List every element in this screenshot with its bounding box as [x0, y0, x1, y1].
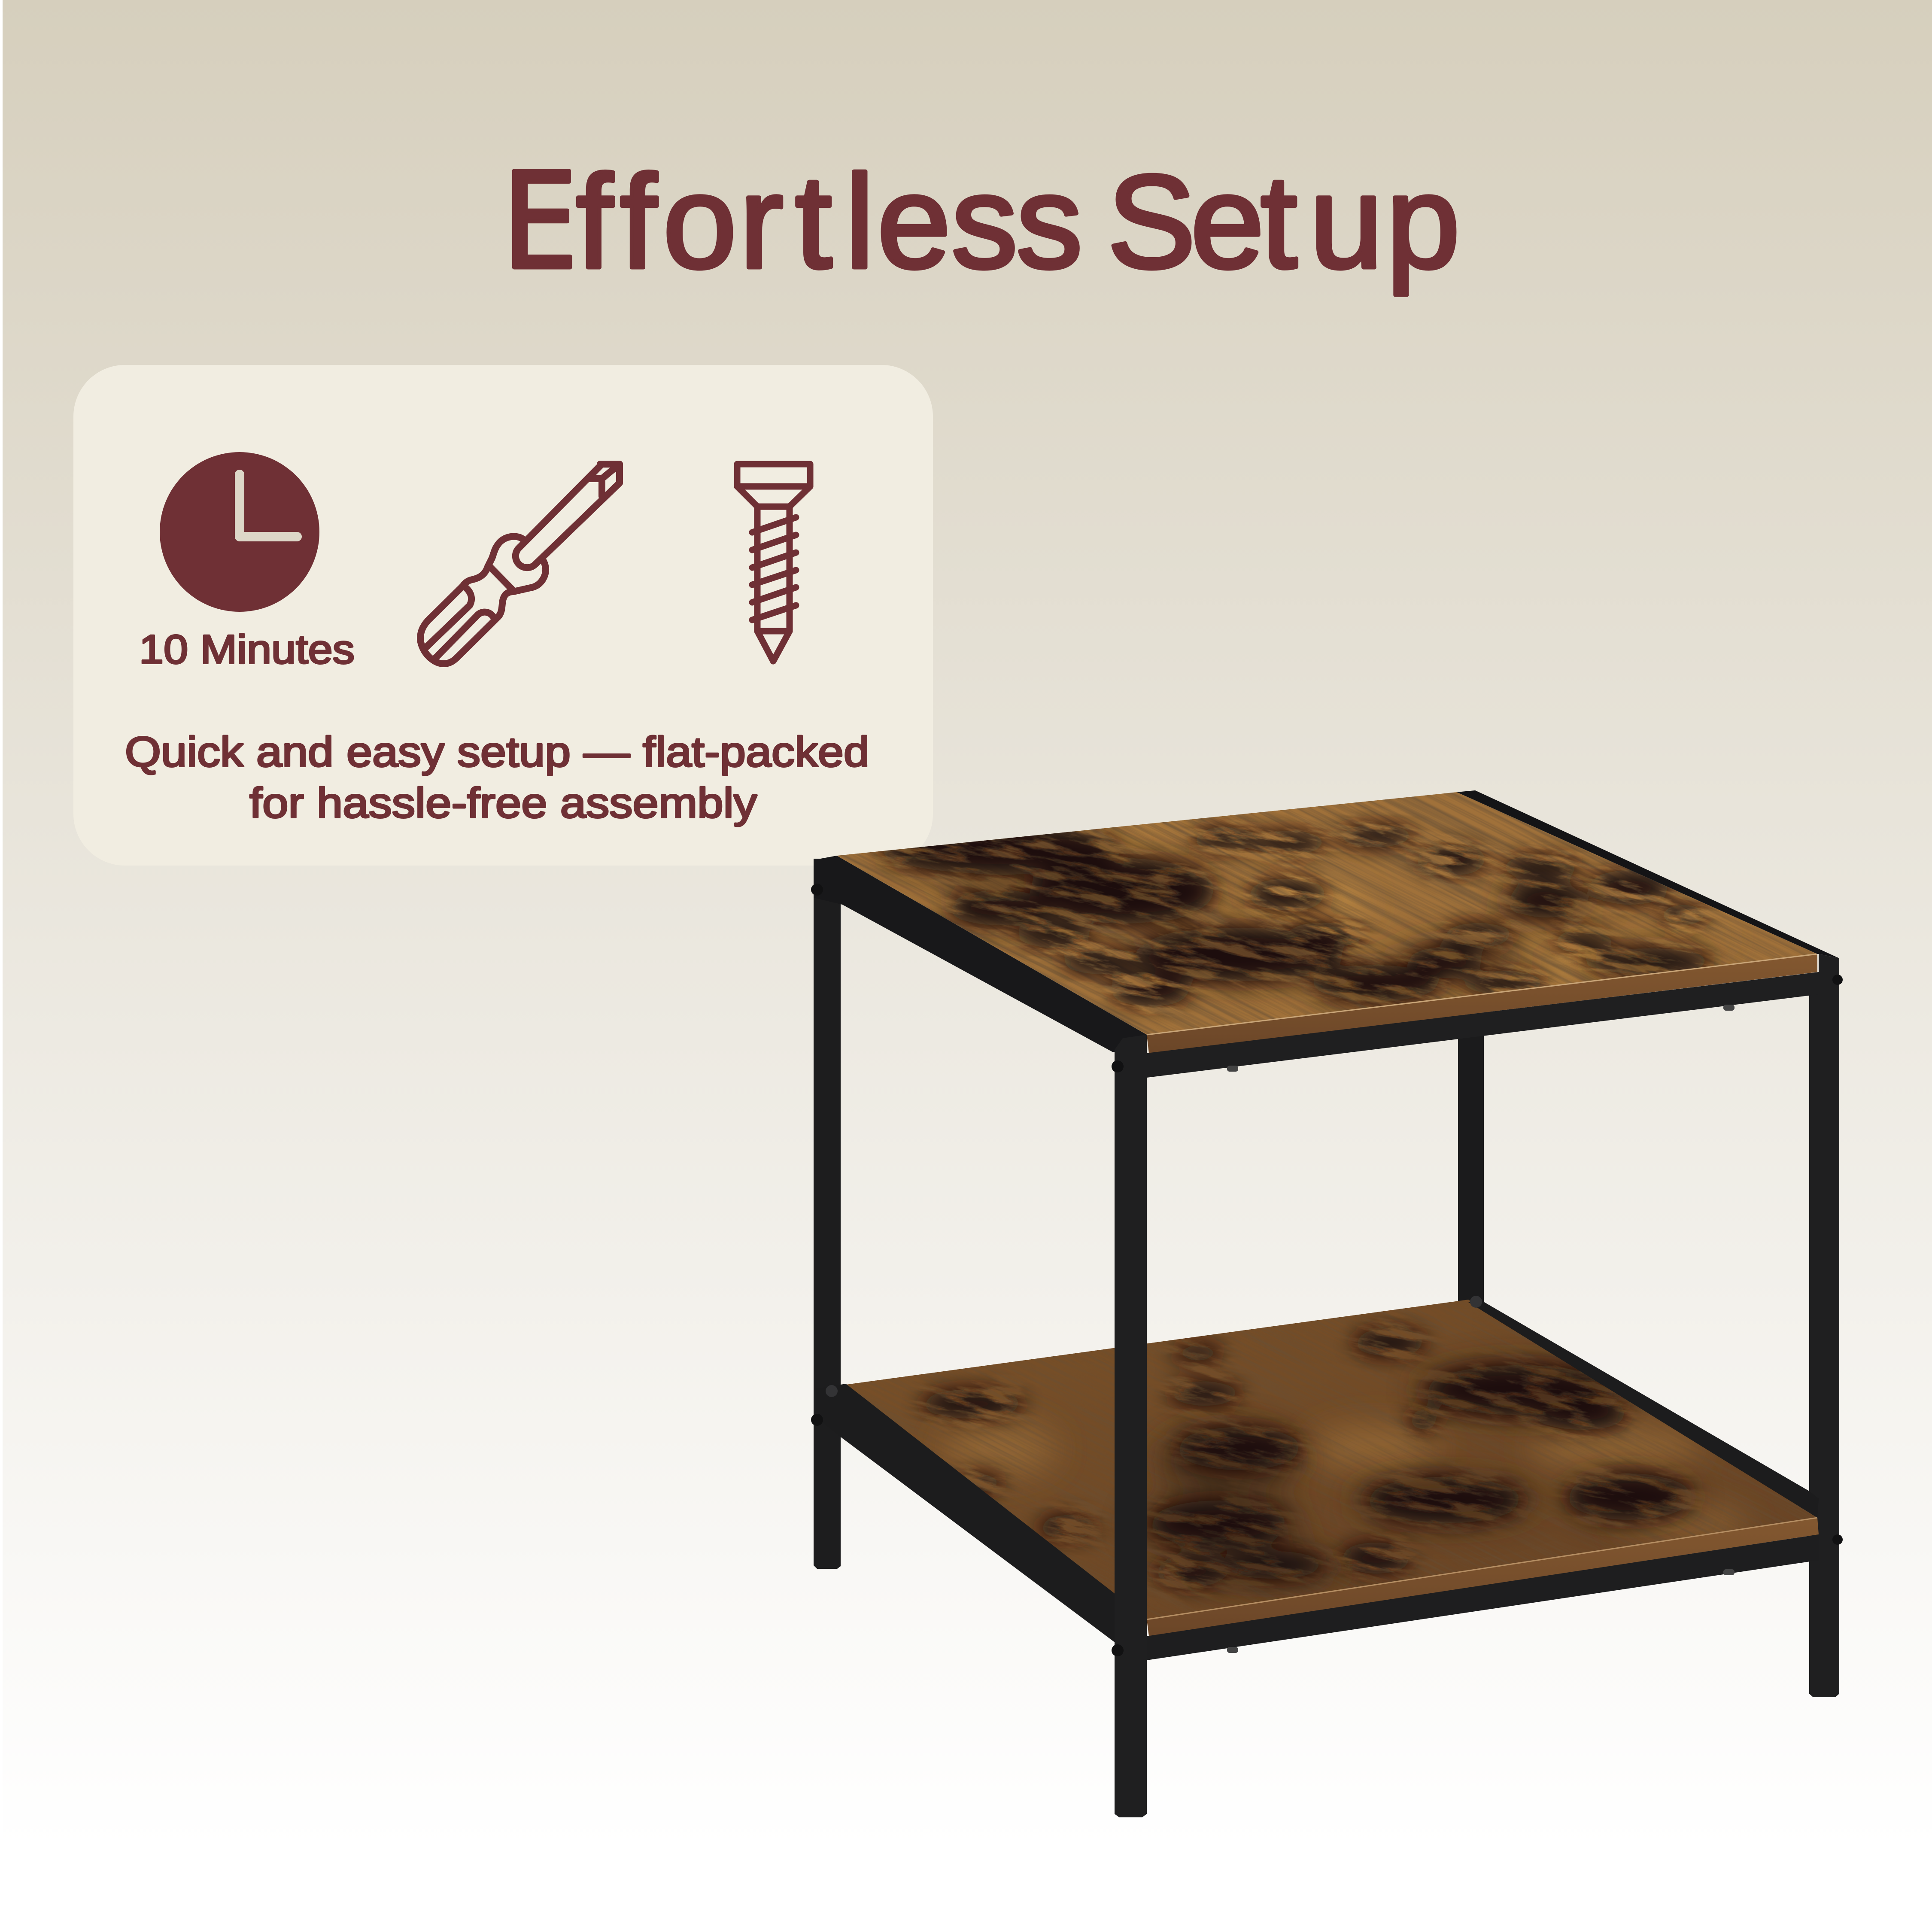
lower front rail	[1147, 1534, 1819, 1660]
upper back-right rail	[1457, 790, 1839, 958]
side table photo	[811, 790, 1843, 1817]
upper front edge	[1147, 954, 1817, 1053]
bolts and feet	[811, 884, 1843, 1656]
lower back-right rail	[1468, 1301, 1819, 1518]
upper front rail	[1147, 972, 1819, 1078]
panel: setup info	[73, 365, 933, 866]
lower shelf top	[847, 1300, 1817, 1619]
description text	[125, 728, 869, 826]
title: Effortless Setup	[502, 144, 1460, 299]
back-left leg	[814, 859, 841, 1569]
lower shelf front edge	[1147, 1518, 1819, 1636]
icon: screw	[737, 464, 810, 661]
infographic canvas	[73, 169, 1843, 1817]
lower left rail	[816, 1384, 1147, 1659]
description text: for hassle-free assembly	[249, 779, 757, 826]
back leg	[1458, 1030, 1484, 1305]
front leg	[1115, 1035, 1147, 1817]
icon: screwdriver	[420, 464, 620, 664]
panel background	[73, 365, 933, 866]
description text: Quick and easy setup — flat-packed	[125, 728, 869, 775]
right leg	[1809, 954, 1839, 1697]
upper left rail	[814, 856, 1147, 1056]
icon: clock	[160, 452, 319, 612]
clock label: 10 Minutes	[139, 627, 355, 672]
upper wooden top	[837, 792, 1816, 1035]
